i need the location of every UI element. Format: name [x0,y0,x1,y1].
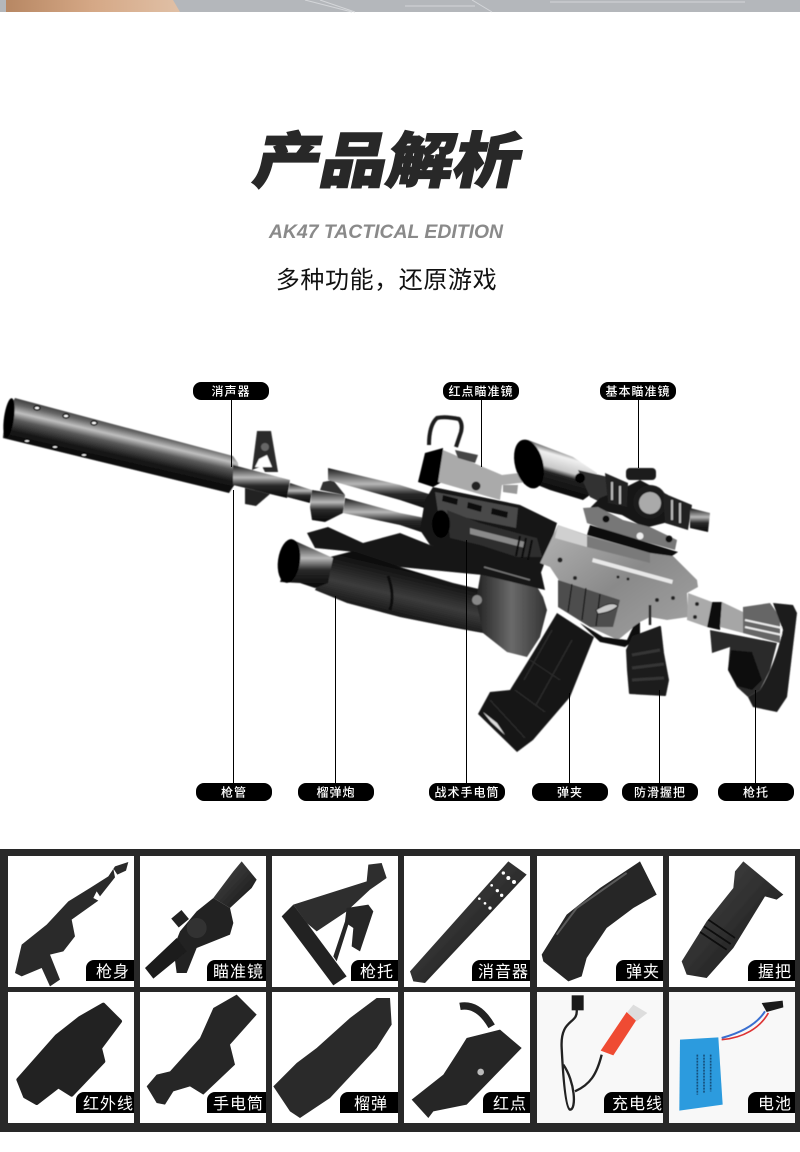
part tile: 枪托: 枪托 [360,963,394,981]
part tile: 消音器 [404,856,530,987]
magazine [478,613,594,752]
part tile: 枪身: 枪身 [96,963,130,981]
pill: 弹夹 [532,783,608,801]
pill: 榴弹炮 [298,783,374,801]
leader lines [232,400,756,783]
tactical flashlight [432,510,542,560]
handguard [420,487,557,575]
pill: 战术手电筒 [429,783,505,801]
part tile: 充电线: 充电线 [612,1095,663,1113]
pill: 枪管: 枪管 [221,784,247,800]
part tile: 手电筒: 手电筒 [213,1095,264,1113]
pill: 基本瞄准镜 [600,382,676,400]
scope [509,436,710,556]
parts panel background [0,849,800,1132]
gas tube and barrel rods [328,468,435,535]
front sight and barrel [233,431,345,522]
pill: 榴弹炮: 榴弹炮 [316,784,356,800]
pill: 基本瞄准镜: 基本瞄准镜 [605,384,671,398]
part tile: 红点 [404,992,530,1123]
part tile: 电池: 电池 [758,1095,792,1113]
part tile: 榴弹: 榴弹 [354,1095,388,1113]
pill: 红点瞄准镜 [443,382,519,400]
stock [687,593,797,712]
part tile: 榴弹 [272,992,398,1123]
pill: 防滑握把 [622,783,698,801]
part tile: 握把: 握把 [758,963,792,981]
part tile: 弹夹 [537,856,663,987]
red dot sight [418,417,527,500]
part tile: 枪身 [8,856,134,987]
silencer [1,397,239,493]
pill: 枪托: 枪托 [743,784,769,800]
part tile: 消音器: 消音器 [478,963,529,981]
grenade launcher [275,527,547,657]
rifle diagram [1,397,797,752]
pill: 枪托 [718,783,794,801]
part tile: 瞄准镜 [140,856,266,987]
pill: 防滑握把: 防滑握把 [634,784,686,800]
pill: 战术手电筒: 战术手电筒 [434,784,500,800]
part tile: 红外线: 红外线 [83,1095,134,1113]
part tile: 瞄准镜: 瞄准镜 [213,962,264,981]
part tile: 手电筒 [140,992,266,1123]
tagline: 多种功能，还原游戏 [276,267,497,294]
top image strip [0,0,800,12]
pistol grip [627,627,668,695]
pill: 消声器: 消声器 [211,384,251,398]
pill: 消声器 [193,382,269,400]
part tile: 红点: 红点 [493,1095,527,1113]
part tile: 红外线 [8,992,134,1123]
part tile: 枪托 [272,856,398,987]
part tile: 弹夹: 弹夹 [626,963,660,981]
title: 产品解析 [247,114,532,200]
part tile: 电池 [669,992,795,1123]
part tile: 握把 [669,856,795,987]
receiver [540,525,698,647]
pill: 红点瞄准镜: 红点瞄准镜 [448,384,514,398]
subtitle english: AK47 TACTICAL EDITION [268,221,504,243]
pill: 弹夹: 弹夹 [557,784,583,800]
pill: 枪管 [196,783,272,801]
part tile: 充电线 [537,992,663,1123]
